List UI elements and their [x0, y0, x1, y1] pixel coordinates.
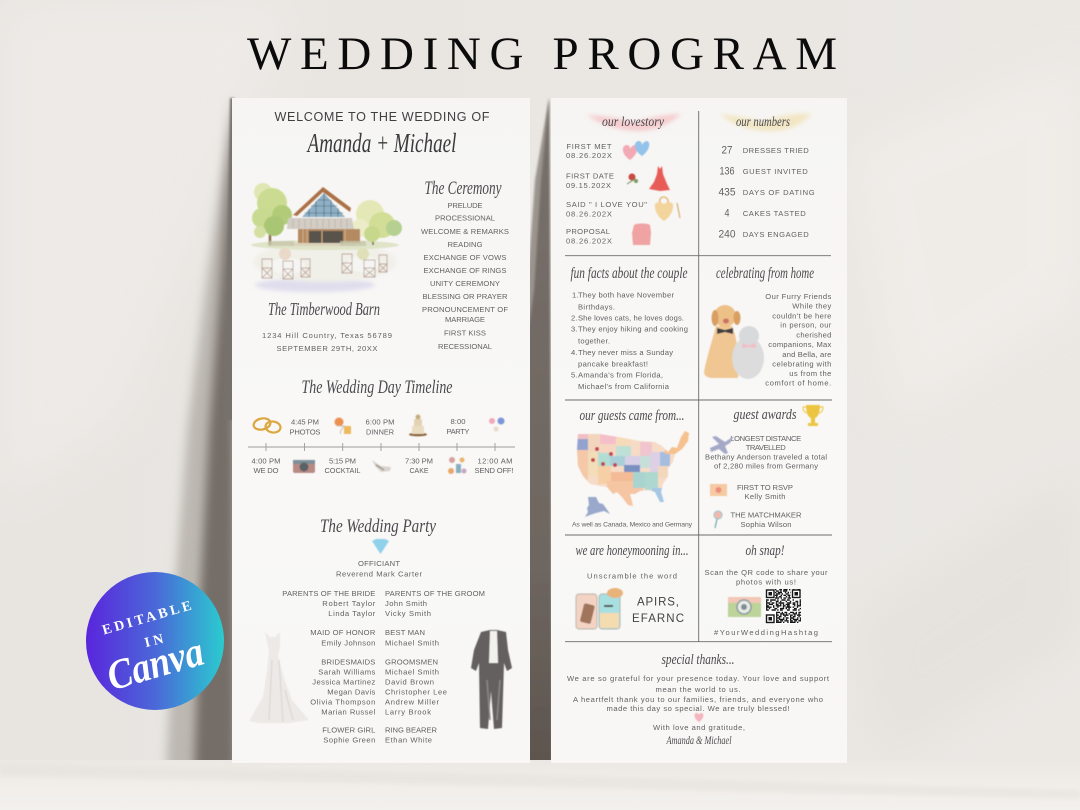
message: We are so grateful for your presence today. Your love and support [567, 674, 830, 683]
panel: bride side names: Olivia Thompson [310, 698, 375, 706]
officiant: OFFICIANT [358, 559, 400, 568]
panel: ceremony order: WELCOME & REMARKS [421, 227, 509, 236]
couple names: Amanda + Michael [306, 128, 456, 158]
dates: 08.26.202X [566, 236, 612, 246]
section: special thanks [567, 652, 830, 747]
panel: ceremony order: UNITY CEREMONY [430, 279, 500, 288]
message: mean the world to us. [656, 685, 740, 694]
number list [718, 144, 815, 240]
label: cake [405, 456, 433, 475]
text: furry friends: in person, our [780, 321, 832, 330]
text: furry friends: couldn't be here [772, 311, 831, 320]
text: furry friends: comfort of home. [765, 379, 831, 388]
label: photos: 4:45 PM [291, 418, 319, 426]
panel: groom side names: Ethan White [385, 736, 432, 744]
list: 2. [571, 314, 577, 323]
list: Michael's from California [578, 382, 670, 391]
list: They enjoy hiking and cooking [578, 325, 688, 334]
list: She loves cats, he loves dogs. [578, 314, 684, 323]
heading: our guests came from... [580, 408, 684, 424]
panel: ceremony order [421, 178, 509, 351]
award: matchmaker: Sophia Wilson [740, 520, 792, 529]
label: we do [252, 456, 280, 475]
dates: 09.15.202X [566, 181, 611, 190]
list: 1. [572, 291, 578, 300]
list: pancake breakfast! [578, 359, 648, 368]
panel: groom side names: Michael Smith [385, 638, 439, 648]
panel: bride side names: MAID OF HONOR [310, 628, 376, 637]
icon: party favours [448, 457, 466, 474]
decoration: pink wisp [587, 114, 681, 131]
icon: balloons [489, 418, 504, 432]
badge: editable in Canva: Canva [102, 629, 209, 700]
label: cake: CAKE [410, 466, 428, 475]
badge: editable in Canva [86, 572, 224, 710]
panel: ceremony order: READING [448, 240, 483, 249]
number list: DRESSES TRIED [743, 146, 809, 155]
floor [0, 760, 1080, 810]
list [571, 291, 688, 391]
icon: suitcases [576, 588, 623, 629]
panel: ceremony order: The Ceremony [424, 178, 502, 199]
text: furry friends: Our Furry Friends [765, 292, 832, 301]
card shadows on wall [86, 96, 551, 760]
icon: magnifier [714, 511, 722, 528]
panel: groom side names: Vicky Smith [385, 609, 431, 618]
icon: shoes [372, 460, 391, 472]
hashtag: #YourWeddingHashtag [714, 628, 818, 637]
icon: hearts [623, 141, 649, 160]
message: made this day so special. We are truly blessed! [606, 704, 790, 713]
chart: US map [576, 430, 690, 518]
label: photos: PHOTOS [290, 428, 320, 436]
panel: ceremony order: RECESSIONAL [438, 342, 492, 351]
label: cake: 7:30 PM [405, 456, 433, 466]
icon: plane [710, 436, 734, 454]
decoration: gold wisp [720, 114, 812, 131]
panel: bride side names: Emily Johnson [321, 638, 375, 648]
panel: groom side names: PARENTS OF THE GROOM [385, 589, 485, 598]
dates: FIRST MET [566, 142, 612, 151]
number list: 27 [722, 144, 732, 156]
panel: groom side names: Michael Smith [385, 668, 439, 676]
panel: bride side names: Sarah Williams [318, 668, 376, 676]
award: matchmaker [730, 510, 802, 529]
list: Amanda's from Florida, [578, 370, 663, 379]
panel: bride side names: BRIDESMAIDS [321, 658, 375, 666]
illustration: barn venue [251, 183, 402, 292]
sign-off: Amanda & Michael [666, 733, 732, 747]
sign-off: With love and gratitude, [653, 723, 745, 732]
label: send off [474, 456, 514, 475]
label: party [446, 417, 470, 436]
icon: envelope [710, 484, 727, 496]
dates [566, 142, 647, 246]
panel: ceremony order: PROCESSIONAL [435, 214, 495, 222]
panel: bride side names: Marian Russel [321, 708, 376, 716]
section: our lovestory [566, 114, 681, 246]
icon: wedding dress [249, 632, 309, 723]
scrambled word [632, 596, 684, 625]
panel: front of program [232, 98, 530, 763]
badge: editable in Canva: EDITABLE [101, 599, 193, 639]
award: first to rsvp [737, 483, 793, 501]
icon: cake [409, 414, 427, 436]
list: They both have November [578, 291, 674, 300]
heading: our numbers [736, 115, 790, 130]
award: matchmaker: THE MATCHMAKER [730, 510, 802, 520]
panel: ceremony order: EXCHANGE OF RINGS [424, 266, 506, 275]
panel: bride side names: Linda Taylor [328, 609, 376, 618]
number list: 435 [718, 186, 736, 198]
icon: camera [728, 597, 761, 617]
label: we do: 4:00 PM [252, 456, 280, 466]
panel: bride side names: Robert Taylor [322, 599, 376, 608]
officiant [336, 559, 422, 578]
award: first to rsvp: FIRST TO RSVP [737, 483, 793, 492]
icon: diamond [372, 539, 389, 554]
panel: ceremony order: EXCHANGE OF VOWS [424, 253, 506, 262]
panel: bride side names: Megan Davis [327, 688, 376, 696]
icon: cat [732, 326, 764, 379]
section: oh snap [704, 543, 828, 637]
badge: editable in Canva: IN [143, 632, 165, 651]
text: furry friends: While they [792, 302, 832, 311]
heading: oh snap! [746, 543, 784, 559]
section: celebrating from home [704, 265, 832, 388]
map pins [591, 447, 617, 467]
icon: heart [695, 713, 703, 722]
panel: groom side names: Larry Brook [385, 708, 431, 716]
text: furry friends: and Bella, are [782, 350, 831, 359]
grid dividers [565, 111, 832, 642]
icon: wedding rings [253, 417, 281, 433]
panel: ceremony order: MARRIAGE [445, 315, 485, 324]
section: guests map [570, 408, 695, 528]
number list: 240 [718, 228, 736, 240]
dates: PROPOSAL [566, 227, 610, 236]
panel: groom side names [385, 589, 485, 744]
award: longest distance: TRAVELLED [746, 443, 786, 452]
number list: 136 [720, 166, 734, 178]
dates: 08.26.202X [566, 209, 612, 218]
message: A heartfelt thank you to our families, friends, and everyone who [573, 695, 823, 704]
number list: 4 [724, 208, 730, 220]
text: furry friends [765, 292, 832, 388]
panel: ceremony order: PRELUDE [448, 201, 482, 210]
panel: groom side names: GROOMSMEN [385, 658, 438, 666]
dates: SAID " I LOVE YOU" [566, 200, 647, 209]
icon: dog [704, 305, 740, 378]
award: longest distance: LONGEST DISTANCE [730, 434, 801, 443]
panel: bride side names [282, 589, 376, 744]
panel: bride side names: Jessica Martinez [312, 678, 376, 686]
panel: ceremony order: FIRST KISS [444, 328, 486, 338]
heading: we are honeymooning in... [576, 543, 688, 559]
section: our numbers [718, 114, 815, 240]
heading: wedding party: The Wedding Party [320, 516, 436, 537]
number list: GUEST INVITED [743, 167, 808, 176]
date: SEPTEMBER 29TH, 20XX [276, 344, 378, 353]
timeline [248, 414, 515, 475]
sign-off [653, 723, 745, 747]
award: longest distance: of 2,280 miles from Germany [714, 461, 818, 470]
panel: bride side names: PARENTS OF THE BRIDE [282, 589, 375, 598]
label: dinner: 6:00 PM [366, 418, 394, 426]
section: fun facts [570, 265, 688, 391]
label: cocktail [324, 456, 360, 475]
label: dinner: DINNER [366, 428, 394, 436]
text: furry friends: celebrating with [772, 360, 831, 369]
list: They never miss a Sunday [578, 348, 673, 357]
instruction: Unscramble the word [587, 572, 677, 581]
section: honeymoon [576, 543, 688, 629]
icon: trophy [803, 405, 823, 426]
number list: DAYS OF DATING [743, 188, 815, 197]
label: dinner [366, 418, 394, 436]
icon: telephone [632, 224, 651, 245]
label: photos [290, 418, 320, 436]
label: party: 8:00 [450, 417, 466, 426]
title: WEDDING PROGRAM [247, 28, 837, 80]
instruction: Scan the QR code to share your [704, 568, 828, 577]
list: together. [578, 336, 610, 345]
scrambled word: EFARNC [632, 613, 684, 625]
label: send off: SEND OFF! [474, 466, 514, 475]
panel: ceremony order: BLESSING OR PRAYER [422, 292, 508, 301]
instruction [704, 568, 828, 587]
list: 3. [571, 325, 577, 334]
panel: groom side names: John Smith [385, 599, 427, 608]
icon: cocktail [334, 418, 351, 434]
panel: groom side names: Christopher Lee [385, 688, 447, 696]
label: cocktail: 5:15 PM [329, 456, 356, 466]
heading: celebrating from home [716, 265, 814, 282]
heading: our lovestory [602, 115, 665, 130]
panel: bride side names: FLOWER GIRL [322, 726, 375, 734]
label: party: PARTY [446, 427, 470, 436]
award: first to rsvp: Kelly Smith [744, 492, 786, 501]
panel: groom side names: David Brown [385, 678, 434, 686]
dates: 08.26.202X [566, 151, 612, 160]
icon: suit [471, 630, 512, 729]
icon: key [677, 203, 680, 218]
officiant: Reverend Mark Carter [336, 570, 422, 578]
heading: timeline: The Wedding Day Timeline [302, 377, 452, 398]
dates: FIRST DATE [566, 171, 614, 180]
text: furry friends: cherished [796, 330, 831, 339]
heading: guest awards [734, 407, 797, 423]
label: cocktail: COCKTAIL [324, 466, 360, 475]
heading: special thanks... [662, 652, 734, 668]
panel: groom side names: Andrew Miller [385, 698, 439, 706]
panel: groom side names: RING BEARER [385, 726, 438, 734]
list: 4. [571, 348, 577, 357]
panel: ceremony order: PRONOUNCEMENT OF [422, 305, 508, 314]
number list: CAKES TASTED [743, 209, 806, 218]
label: we do: WE DO [254, 466, 279, 475]
address: 1234 Hill Country, Texas 56789 [262, 331, 392, 340]
list: 5. [571, 370, 577, 379]
venue name: The Timberwood Barn [268, 299, 380, 319]
award: longest distance [705, 434, 827, 470]
scrambled word: APIRS, [637, 596, 679, 608]
icon: love lock [655, 197, 673, 221]
text: furry friends: companions, Max [768, 340, 832, 349]
caption: As well as Canada, Mexico and Germany [572, 522, 693, 528]
panel: back of program [551, 98, 847, 763]
message [567, 674, 830, 713]
panel: bride side names: Sophie Green [323, 736, 375, 744]
heading: welcome: WELCOME TO THE WEDDING OF [274, 110, 490, 124]
instruction: photos with us! [736, 578, 796, 587]
award: longest distance: Bethany Anderson traveled a total [705, 452, 827, 462]
section: guest awards [705, 405, 827, 529]
text: furry friends: us from the [789, 369, 831, 378]
icon: camera [293, 460, 315, 473]
icon: rose [627, 174, 638, 184]
icon: red dress [649, 166, 670, 191]
label: send off: 12:00 AM [478, 456, 512, 466]
Alaska [585, 497, 610, 517]
QR code [766, 589, 801, 624]
panel: groom side names: BEST MAN [385, 628, 425, 637]
number list: DAYS ENGAGED [743, 230, 809, 239]
heading: fun facts about the couple [570, 265, 688, 282]
list: Birthdays. [578, 302, 615, 311]
